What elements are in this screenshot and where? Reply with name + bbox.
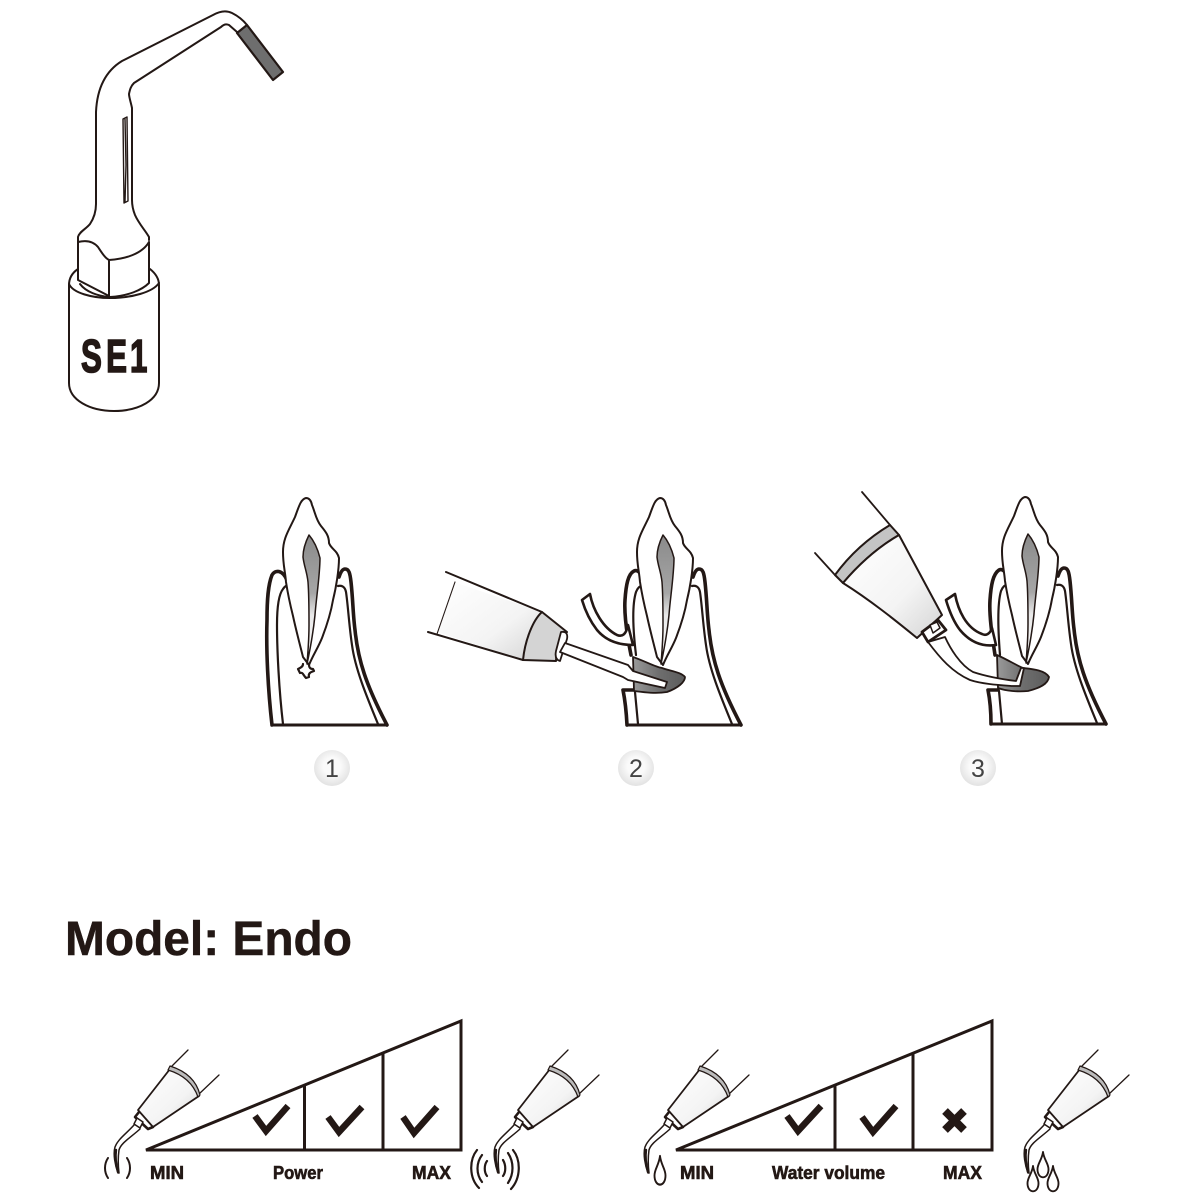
power check 2 — [328, 1107, 362, 1132]
step 3 right bone — [1057, 568, 1106, 724]
water wedge with three segments — [676, 1021, 992, 1150]
water MIN label: MIN — [680, 1163, 714, 1183]
step 2 base line — [627, 724, 741, 726]
step 3 nozzle — [922, 620, 946, 642]
tip collar cylinder — [69, 269, 159, 411]
step 3 handpiece — [815, 492, 890, 575]
badge: step number 3 — [960, 750, 996, 786]
step 1 tooth crown — [283, 498, 339, 665]
step 2 handpiece grey nose — [523, 612, 567, 661]
step 2 left bone and flap — [623, 571, 645, 725]
small vibration arcs — [105, 1158, 130, 1178]
large vibration arcs — [471, 1150, 519, 1189]
single water drop — [654, 1156, 666, 1185]
step 1 left bone — [267, 571, 287, 725]
badge: step number 2: 2 — [629, 755, 643, 783]
step 3 left bone and flap — [988, 570, 1010, 724]
icon: handpiece low power — [105, 1050, 219, 1178]
step 3 exposed cavity — [997, 655, 1049, 691]
tip model label: SE1 — [81, 331, 147, 383]
step 2 exposed cavity — [633, 657, 685, 693]
power check 3 — [403, 1107, 437, 1133]
chart: power scale — [146, 1021, 461, 1183]
icon: handpiece high power — [471, 1050, 599, 1189]
badge: step number 1 — [314, 750, 350, 786]
chart: water volume scale — [676, 1021, 992, 1183]
step 3 bent tip — [928, 637, 1024, 686]
step 3 base line — [991, 722, 1106, 726]
step 2 right bone — [692, 569, 741, 725]
title: Model: Endo — [65, 913, 352, 966]
power MIN label: MIN — [150, 1163, 184, 1183]
three water drops — [1028, 1152, 1058, 1191]
icon: handpiece high water — [1024, 1050, 1129, 1191]
step 1 root apex lesion — [298, 664, 314, 678]
icon: SE1 dental tip — [69, 11, 283, 411]
step 2 handpiece body — [437, 582, 542, 660]
power MAX label: MAX — [412, 1163, 451, 1183]
water MAX label: MAX — [943, 1163, 982, 1183]
step 3 tooth crown — [1002, 497, 1058, 664]
step 1 right bone — [338, 569, 387, 725]
step 1 base line — [272, 724, 387, 726]
power axis label: Power — [273, 1163, 323, 1183]
badge: step number 3: 3 — [971, 755, 985, 783]
hex connector — [78, 241, 149, 297]
water check 2 — [862, 1106, 896, 1132]
power wedge with three segments — [146, 1021, 461, 1150]
panel: step 2 tooth and handpiece — [428, 498, 741, 725]
panel: step 3 tooth and handpiece — [815, 492, 1106, 724]
badge: step number 1: 1 — [325, 755, 339, 783]
collar front rim — [69, 283, 159, 298]
water cross — [945, 1111, 964, 1130]
step 2 tooth crown — [637, 498, 693, 665]
water axis label: Water volume — [772, 1163, 885, 1183]
shaft slot — [123, 117, 128, 203]
badge: step number 2 — [618, 750, 654, 786]
water check 1 — [787, 1106, 821, 1131]
grey working tip — [237, 25, 283, 80]
step 2 instrument — [560, 643, 667, 688]
power check 1 — [255, 1106, 288, 1131]
tip shaft — [78, 11, 247, 242]
panel: step 1 tooth — [267, 498, 387, 725]
icon: handpiece low water — [644, 1050, 749, 1185]
